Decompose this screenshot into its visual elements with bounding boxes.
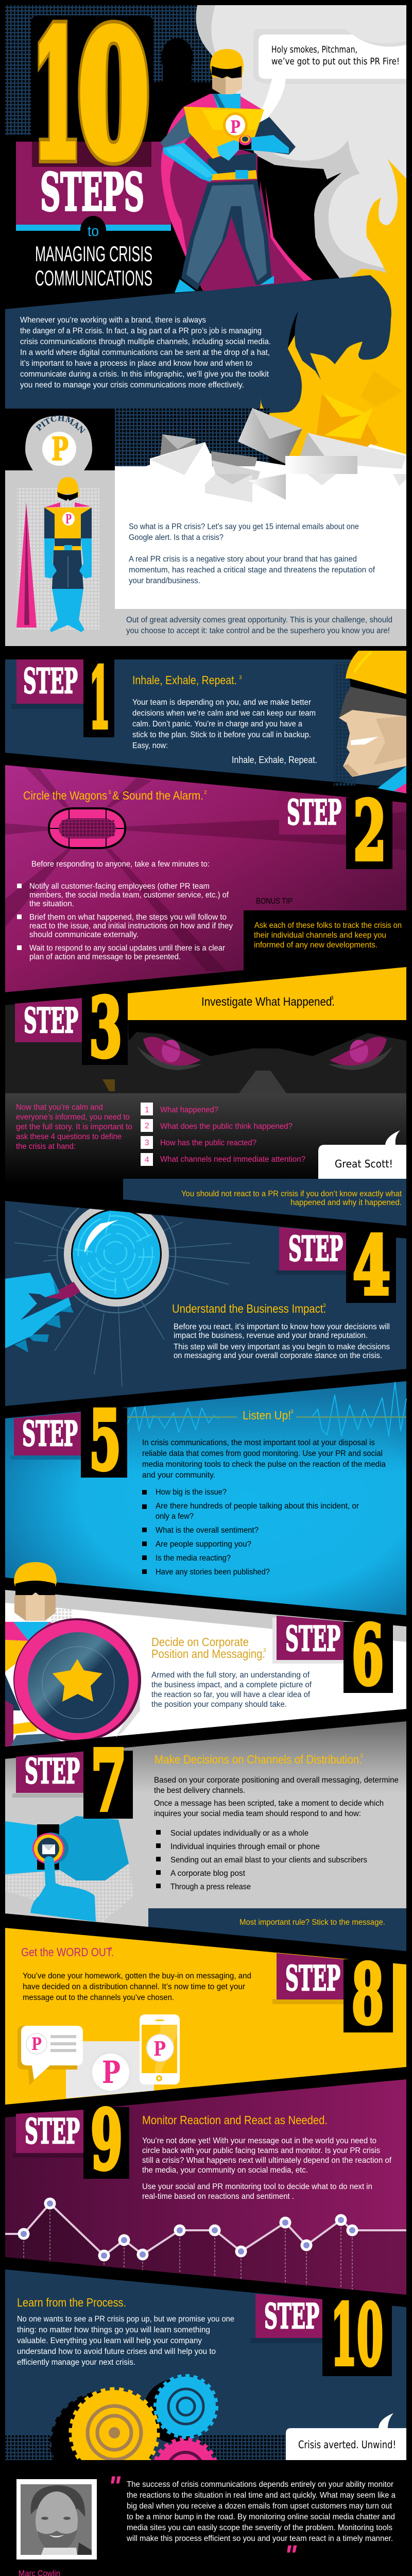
callout: great scott: [318, 1130, 406, 1179]
yellow heading banner: Investigate What Happened.: [201, 995, 335, 1008]
step 8 text: message out to the channels you’ve chosen.: [23, 1993, 174, 2002]
step 9 badge: 9: [91, 2093, 123, 2188]
step 3 question list: 3: [145, 1139, 149, 1147]
step 10 badge: [251, 2286, 392, 2384]
panel: what is a crisis: Google alert. Is that a crisis?: [129, 533, 224, 542]
illustration: hero with shield: [5, 1562, 141, 1747]
step 1 badge: STEP: [23, 661, 78, 701]
step 7 text: the best delivery channels.: [154, 1786, 245, 1795]
callout: crisis averted: [286, 2413, 406, 2460]
step 9 text: Use your social and PR monitoring tool to decide what to do next in: [142, 2182, 372, 2191]
step 5 heading: Listen Up!: [243, 1409, 291, 1422]
smoke cloud: [196, 5, 406, 281]
quote text: the reactions to the situation in real time and act quickly. What may seem like a: [127, 2491, 396, 2500]
quote text: media sites you can easily scope the severity of the problem. Monitoring tools: [127, 2523, 392, 2532]
illustration: magnifying glass: [14, 1194, 250, 1387]
bonus tip: BONUS TIP: [256, 897, 293, 906]
portrait photo: [16, 2479, 97, 2560]
panel: step 9: [5, 2079, 406, 2295]
step 3 question list: What happened?: [160, 1106, 218, 1114]
step 2 text: Notify all customer-facing employees (other PR team: [29, 882, 210, 891]
step 1 text: decisions when we’re calm and we can keep our team: [132, 709, 316, 718]
yellow gear: [69, 2387, 160, 2460]
step 1 badge: [11, 650, 114, 748]
panel: testimonial: [16, 2470, 396, 2576]
title line managing: MANAGING CRISIS: [35, 242, 152, 266]
step 4 text: This step will be very important as you begin to make decisions: [174, 1343, 390, 1351]
step 8 badge: [272, 1947, 393, 2042]
icon: hand holding glass: [5, 1273, 80, 1352]
step 7 text: Once a message has been scripted, take a moment to decide which: [154, 1799, 384, 1808]
yellow heading banner: 3: [331, 995, 334, 1001]
panel: hero header: [5, 0, 406, 646]
step 7 badge: 7: [91, 1732, 127, 1830]
step 7 bullet list: Through a press release: [170, 1883, 251, 1891]
step 4 text: Before you react, it’s important to know how your decisions will: [174, 1323, 390, 1331]
step 5 text: [142, 1438, 386, 1480]
step 7 text: Based on your corporate positioning and overall messaging, determine: [154, 1776, 399, 1785]
step 10 text: thing: no matter how things go you will learn something: [17, 2326, 210, 2334]
step 5 bullet list: Are there hundreds of people talking about this incident, or: [156, 1502, 359, 1511]
panel: what is a crisis: Out of great adversity comes great opportunity. This is your challenge, should: [126, 616, 392, 624]
panel: step 5: [5, 1381, 406, 1615]
step 4 heading: 3: [323, 1303, 326, 1309]
background grid: [5, 5, 216, 135]
panel: intro: Whenever you’re working with a brand, there is always: [20, 316, 206, 325]
purple title panel: [16, 142, 171, 231]
step 10 text: valuable. Everything you learn will help your company: [17, 2336, 202, 2345]
icon: chat bubble: P: [31, 2034, 42, 2055]
icon: phone: [140, 2014, 180, 2084]
callout: stick to the message: Most important rule? Stick to the message.: [239, 1918, 385, 1927]
step 3 question list: What does the public think happened?: [160, 1122, 293, 1131]
step 2 heading: 3: [108, 790, 111, 795]
panel: intro: crisis communications through multiple channels, including social media.: [20, 337, 271, 346]
step 3 question list: 4: [145, 1156, 149, 1164]
step 2 badge: [279, 784, 392, 879]
step 9 badge: [12, 2093, 129, 2188]
step 3 intro text: get the full story. It is important to: [16, 1123, 132, 1131]
step 3 question list: 1: [145, 1106, 149, 1114]
panel: step 6: [5, 1562, 406, 1747]
step 5 text: media monitoring tools to check the pulse on the reaction of the media: [142, 1460, 386, 1469]
step 9 text: the media, your community on social media, etc.: [142, 2166, 308, 2175]
panel: intro: the danger of a PR crisis. In fact, a big part of a PR pro’s job is managing: [20, 327, 262, 335]
speech bubble: Holy smokes, Pitchman,: [271, 44, 357, 55]
step 7 text: inquires your social media team should respond to and how:: [154, 1809, 361, 1818]
step 5 bullet list: [142, 1488, 359, 1577]
callout strip: [123, 1179, 406, 1226]
quote text: [126, 2480, 396, 2543]
step 8 heading: 2: [109, 1946, 112, 1952]
icon: phone: P: [153, 2037, 166, 2060]
hero figure: [160, 49, 313, 293]
pitchman medal: [25, 415, 92, 470]
title word STEPS: STEPS: [40, 162, 144, 223]
step 5 bullet list: Are people supporting you?: [156, 1540, 251, 1549]
step 1 heading: 3: [239, 675, 242, 681]
panel: what is a crisis: So what is a PR crisis? Let's say you get 15 internal emails about one: [129, 522, 359, 531]
pink gear: [153, 2437, 217, 2460]
step 9 text: [142, 2137, 392, 2201]
quote text: to be a minor bump in the road. By monitoring online social media chatter and: [127, 2513, 395, 2521]
step 2 heading: Circle the Wagons: [23, 789, 107, 802]
callout: great scott: Great Scott!: [335, 1158, 393, 1170]
panel: step 10: [5, 2269, 406, 2460]
step 6 badge: STEP: [285, 1619, 340, 1659]
step 3 question list: 2: [145, 1122, 149, 1130]
icon: email pile: [134, 371, 406, 502]
step 9 text: circle back with your public facing teams and monitor. Is your PR crisis: [142, 2146, 380, 2155]
villain eyes: [137, 1037, 393, 1070]
black gears: [50, 2379, 197, 2460]
step 8 text: [23, 1972, 251, 2002]
panel: intro: [5, 275, 391, 413]
step 1 heading: Inhale, Exhale, Repeat.: [132, 673, 237, 687]
step 4 badge: 4: [353, 1218, 390, 1313]
step 5 badge: 5: [89, 1393, 121, 1488]
callout: stick to the message: [148, 1908, 406, 1951]
step 5 text: In crisis communications, the most important tool at your disposal is: [142, 1438, 375, 1447]
step 6 text: the position your company should take.: [151, 1700, 287, 1709]
step 10 badge: STEP: [264, 2296, 319, 2336]
step 5 bullet list: Is the media reacting?: [156, 1554, 231, 1563]
step 2 text: Brief them on what happened, the steps you will follow to: [29, 913, 227, 922]
step 10 heading: Learn from the Process.: [17, 2296, 126, 2309]
step 7 badge: [12, 1732, 133, 1830]
step 7 heading: 3: [360, 1753, 363, 1759]
illustration: hero face profile: [334, 651, 406, 793]
callout strip: happened and why it happened.: [290, 1198, 402, 1207]
step 8 text: You’ve done your homework, gotten the buy-in on messaging, and: [23, 1972, 251, 1980]
step 7 bullet list: [156, 1829, 367, 1891]
step 4 text: [174, 1323, 390, 1360]
panel: step 8: [5, 1928, 406, 2105]
step 6 badge: [272, 1608, 393, 1703]
step 6 heading: Decide on Corporate: [151, 1635, 249, 1649]
icon: chat bubble: [21, 2026, 83, 2080]
grid behind envelopes: [115, 409, 269, 473]
step 9 text: still a crisis? What happens next will ultimately depend on the reaction of: [142, 2156, 392, 2165]
step 6 badge: 6: [352, 1608, 384, 1703]
icon: central P badge: P: [102, 2055, 121, 2091]
waveform: [127, 1382, 406, 1436]
small gold shard: [102, 1079, 115, 1091]
step 2 text: react to the issue, and initial instructions on how and if they: [29, 922, 233, 930]
yellow heading banner: [128, 967, 406, 1020]
step 7 bullet list: A corporate blog post: [170, 1869, 246, 1878]
step 2 badge: STEP: [287, 792, 341, 833]
step 5 bullet list: What is the overall sentiment?: [156, 1526, 259, 1535]
step 10 text: No one wants to see a PR crisis pop up, but we promise you one: [17, 2315, 234, 2324]
panel: intro: communicate during a crisis. In this infographic, we’ll give you the toolkit: [20, 370, 269, 379]
step 8 badge: 8: [352, 1947, 384, 2042]
step 7 bullet list: Social updates individually or as a whole: [170, 1829, 308, 1838]
step 2 text: the situation.: [29, 900, 74, 908]
step 4 badge: [276, 1218, 396, 1313]
line chart: [5, 2198, 406, 2295]
step 7 text: [154, 1776, 399, 1818]
panel: step 1: [5, 650, 406, 793]
waveform baseline: [127, 1416, 406, 1418]
illustration: gears: [50, 2374, 218, 2460]
step 7 bullet list: Individual inquiries through email or phone: [170, 1842, 320, 1851]
step 1 text: Your team is depending on you, and we make better: [132, 698, 311, 707]
hero figure: P: [230, 117, 241, 138]
bonus tip: their individual channels and keep you: [254, 931, 386, 940]
panel: step 2: [5, 765, 406, 992]
panel: step 7: [5, 1721, 406, 1951]
step 5 text: reliable data that comes from good monitoring. Use your PR and social: [142, 1449, 383, 1458]
panel: intro: In a world where digital communications can be sent at the drop of a hat,: [20, 348, 270, 357]
step 2 heading: & Sound the Alarm.: [112, 789, 203, 802]
quotation mark open: ": [108, 2470, 121, 2502]
flames: [210, 159, 406, 456]
black silhouette: [154, 38, 216, 135]
panel: what is a crisis: A real PR crisis is a negative story about your brand that has gained: [129, 555, 357, 564]
step 3 intro text: the crisis at hand:: [16, 1142, 76, 1151]
step 2 text: plan of action and message to be presented.: [29, 953, 181, 961]
step 7 bullet list: Sending out an email blast to your clients and subscribers: [170, 1856, 367, 1865]
step 4 text: on messaging and your overall corporate stance on the crisis.: [174, 1351, 382, 1360]
quote text: will make this process efficient so you and your team react in a timely manner.: [126, 2534, 393, 2543]
panel: step 4: [5, 1194, 406, 1406]
step 6 text: the business impact, and a complete picture of: [151, 1681, 312, 1689]
step 3 badge: 3: [89, 980, 122, 1076]
illustration: hand pressing wrist watch: [5, 1816, 134, 1922]
step 1 text: calm. Don’t panic. You’re in charge and you have a: [132, 720, 302, 728]
step 10 text: understand how to avoid future crises and will help you to: [17, 2347, 216, 2356]
step 2 text: [17, 860, 233, 961]
step 3 question list: How has the public reacted?: [160, 1139, 256, 1147]
step 3 intro text: Now that you’re calm and: [16, 1103, 103, 1112]
step 8 heading: Get the WORD OUT.: [21, 1945, 114, 1959]
decorative rays: [5, 765, 406, 971]
step 5 bullet list: only a few?: [156, 1512, 194, 1521]
step 8 text: have decided on a distribution channel. It’s now time to get your: [23, 1982, 245, 1991]
step 3 intro text: ask these 4 questions to define: [16, 1132, 122, 1141]
icon: alarm: [48, 807, 126, 849]
panel: what is a crisis: your brand/business.: [129, 577, 200, 585]
icon: pitchman full figure: P: [65, 512, 72, 527]
icon: central P badge: [90, 2051, 132, 2093]
step 3 intro text: [16, 1103, 132, 1151]
step 4 heading: Understand the Business Impact.: [172, 1302, 326, 1315]
step 5 bullet list: Have any stories been published?: [156, 1568, 270, 1577]
step 2 heading: 2: [204, 790, 207, 795]
step 7 badge: STEP: [25, 1751, 80, 1791]
step 5 heading: 3: [290, 1409, 294, 1415]
title line communications: COMMUNICATIONS: [35, 266, 152, 290]
step 6 text: Armed with the full story, an understanding of: [151, 1671, 310, 1680]
panel: step 1: 1: [89, 650, 110, 748]
step 6 heading: Position and Messaging.: [151, 1647, 265, 1660]
bonus tip: informed of any new developments.: [254, 941, 377, 950]
panel: step 3: [5, 967, 406, 1226]
step 1 text: Easy, now:: [132, 741, 168, 750]
step 1 text: Inhale, Exhale, Repeat.: [232, 755, 317, 765]
title word to: [80, 216, 106, 245]
step 6 text: [151, 1671, 312, 1709]
icon: pitchman full figure: [16, 477, 99, 632]
step 9 text: You’re not done yet! With your message out in the world you need to: [142, 2137, 376, 2145]
step 9 heading: Monitor Reaction and React as Needed.: [142, 2113, 328, 2127]
panel: intro: you need to manage your crisis communications more effectively.: [20, 381, 244, 389]
bonus tip: Ask each of these folks to track the crisis on: [254, 921, 402, 930]
step 10 text: efficiently manage your next crisis.: [17, 2358, 135, 2367]
bonus tip: [254, 897, 402, 950]
lower face gradient: [5, 1093, 406, 1185]
step 2 heading: [23, 789, 207, 802]
quotation mark close: ": [284, 2539, 297, 2571]
panel: what is a crisis: you choose to accept it: take control and be the superhero you know you are!: [126, 626, 390, 635]
step 10 text: [17, 2315, 234, 2367]
step 3 badge: STEP: [24, 1001, 78, 1041]
dot texture: [52, 1608, 140, 1737]
step 2 text: should communicate externally.: [29, 930, 139, 939]
step 3 question list: What channels need immediate attention?: [160, 1155, 305, 1164]
step 6 heading: [151, 1635, 266, 1660]
step 5 bullet list: How big is the issue?: [156, 1488, 227, 1497]
villain nose: [239, 1071, 286, 1093]
cowl shadow: [128, 1020, 406, 1056]
step 4 badge: STEP: [288, 1229, 343, 1269]
speech bubble: [247, 29, 406, 137]
step 8 badge: STEP: [285, 1958, 340, 1998]
step 5 badge: STEP: [22, 1414, 78, 1454]
panel: what is a crisis: momentum, has reached a critical stage and threatens the reputation of: [129, 566, 375, 574]
step 2 text: Before responding to anyone, take a few minutes to:: [31, 860, 210, 869]
grid strip: [5, 2435, 286, 2460]
step 4 text: impact the business, revenue and your brand reputation.: [174, 1331, 368, 1340]
step 2 badge: 2: [353, 784, 386, 879]
step 1 text: [132, 698, 317, 765]
panel: intro: it’s important to have a process in place and know how and when to: [20, 359, 252, 368]
step 6 text: the reaction so far, you will have a clear idea of: [151, 1690, 311, 1699]
title word to: to: [88, 223, 99, 240]
pitchman medal: PITCHMAN: [36, 415, 85, 434]
step 6 heading: 3: [263, 1648, 266, 1653]
illustration: channels icons: [18, 2014, 180, 2098]
step 3 badge: [15, 980, 128, 1076]
step 3 intro text: everyone’s informed, you need to: [16, 1113, 130, 1122]
step 7 heading: Make Decisions on Channels of Distribution.: [154, 1753, 362, 1766]
step 3 question list: [141, 1103, 305, 1166]
quote text: The success of crisis communications depends entirely on your ability monitor: [127, 2480, 393, 2489]
callout strip: You should not react to a PR crisis if you don’t know exactly what: [181, 1190, 402, 1198]
cyan gear: [156, 2376, 216, 2437]
step 2 text: members, the social media team, customer service, etc.) of: [29, 891, 229, 900]
step 1 text: stick to the plan. Stick to it before you call in backup.: [132, 731, 311, 739]
panel: what is a crisis: [5, 466, 406, 646]
step 2 text: Wait to respond to any social updates until there is a clear: [29, 944, 225, 953]
step 5 text: and your community.: [142, 1471, 215, 1480]
quote text: big deal when you receive a dozen emails from upset customers may turn out: [127, 2502, 392, 2511]
step 5 badge: [10, 1393, 127, 1488]
black panel under intro: [5, 409, 115, 470]
step 9 text: real-time based on reactions and sentiment .: [142, 2192, 294, 2201]
step 9 badge: STEP: [25, 2111, 80, 2151]
pitchman medal: P: [52, 430, 68, 468]
